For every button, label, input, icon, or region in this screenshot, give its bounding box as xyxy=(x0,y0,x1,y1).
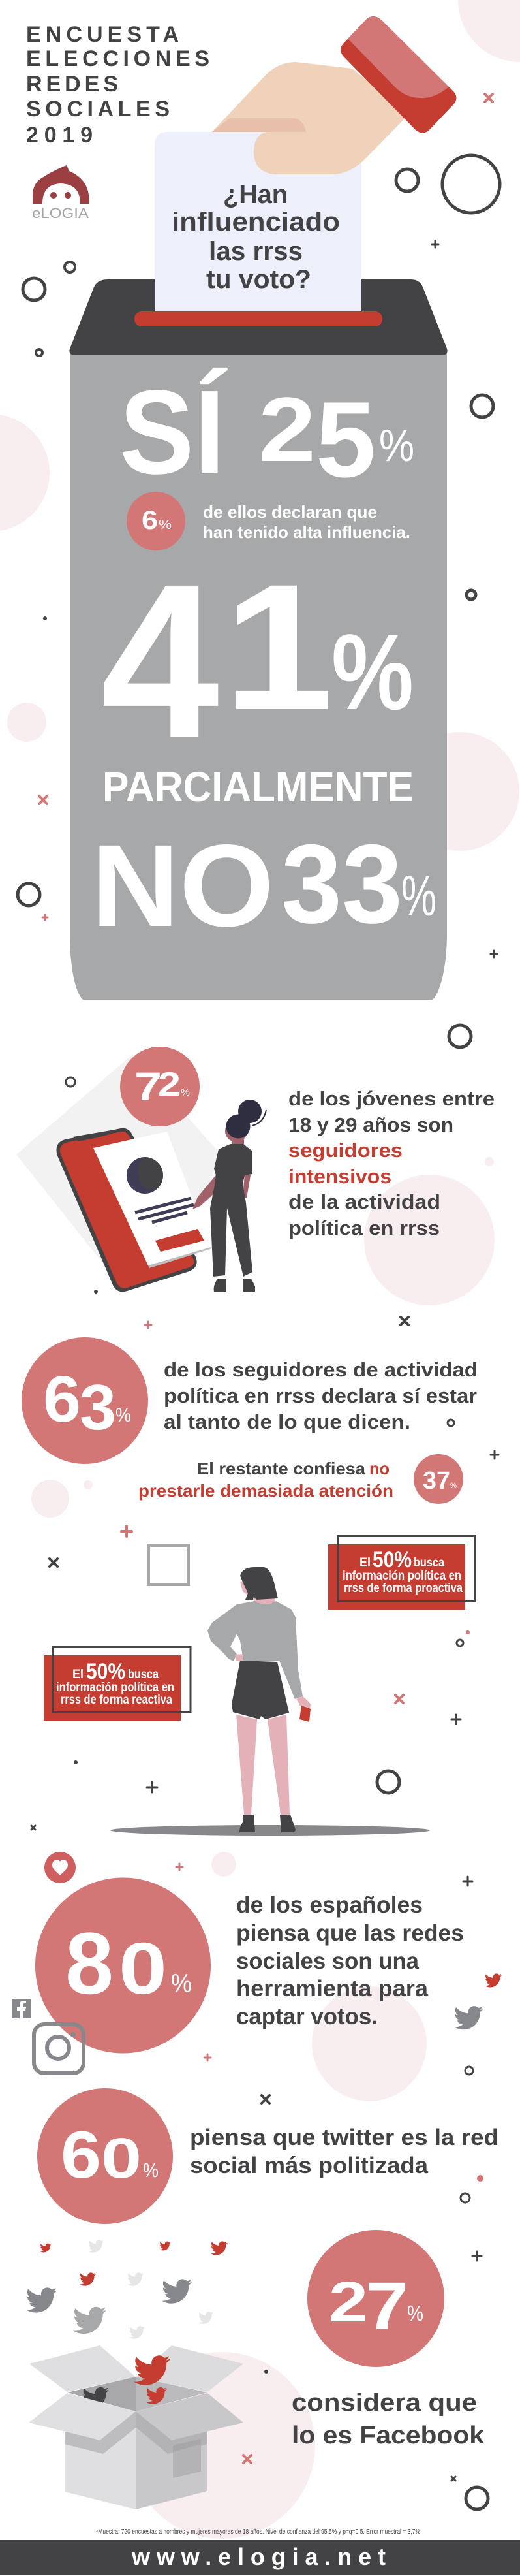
title: SOCIALES xyxy=(26,97,170,121)
answer: parcialmente 41% xyxy=(100,539,414,810)
text: remaining: El restante confiesa xyxy=(197,1459,366,1478)
stat circle: 60% xyxy=(37,2088,173,2224)
callout: 6%: % xyxy=(159,518,172,532)
text: spaniards: captar votos. xyxy=(236,2004,378,2029)
text: young followers: de los jóvenes entre xyxy=(288,1087,495,1110)
text: facebook xyxy=(292,2389,485,2449)
text: remaining xyxy=(138,1459,393,1501)
panel: proactive vs reactive xyxy=(44,1536,475,1836)
text: young followers: intensivos xyxy=(288,1165,391,1188)
text: young followers xyxy=(288,1087,495,1239)
title xyxy=(26,22,209,148)
icons: flying twitter birds xyxy=(26,2240,228,2339)
stat circle: 72%: 2 xyxy=(158,1066,181,1104)
ballot paper with question: tu voto? xyxy=(206,265,311,294)
stat circle: 72%: 7 xyxy=(134,1064,162,1109)
title: ENCUESTA xyxy=(26,22,179,47)
panel: 27% facebook xyxy=(26,2230,485,2509)
stat circle: 63%: 6 xyxy=(43,1363,81,1436)
answer: parcialmente 41%: % xyxy=(331,612,414,732)
illustration: phone xyxy=(56,1128,212,1292)
answer: si 25%: SÍ xyxy=(119,365,228,499)
callout: reactive: El xyxy=(72,1668,84,1681)
title: REDES xyxy=(26,72,118,97)
stat circle: 37%: % xyxy=(450,1481,457,1490)
callout: proactive: 50% xyxy=(373,1548,412,1572)
callout: proactive: El xyxy=(359,1556,371,1570)
text: young followers: de la actividad xyxy=(288,1190,440,1213)
panel: 72% young followers xyxy=(16,1047,495,1292)
text: spaniards: piensa que las redes xyxy=(236,1920,464,1946)
text: facebook: considera que xyxy=(292,2389,477,2417)
text: spaniards: de los españoles xyxy=(236,1892,423,1918)
text: facebook: lo es Facebook xyxy=(292,2422,485,2449)
icon: facebook xyxy=(12,1999,31,2018)
stat circle: 80% xyxy=(35,1878,211,2053)
icon: elogia logo: eLOGIA xyxy=(32,205,89,221)
text: young followers: política en rrss xyxy=(288,1216,440,1239)
stat circle: 72% xyxy=(120,1047,200,1126)
stat circle: 63%: 3 xyxy=(80,1371,116,1443)
callout: proactive: busca xyxy=(414,1556,444,1570)
ballot paper with question: influenciado xyxy=(172,208,340,236)
stat circle: 37%: 37 xyxy=(423,1467,450,1495)
illustration: woman from behind xyxy=(110,1567,430,1836)
stat circle: 60%: 0 xyxy=(101,2127,142,2190)
text: aware followers xyxy=(164,1358,478,1433)
callout: reactive xyxy=(44,1647,191,1721)
text: remaining: no xyxy=(369,1459,390,1478)
text: aware followers: política en rrss declara sí estar xyxy=(164,1384,477,1407)
callout: proactive: rrss de forma proactiva xyxy=(344,1582,463,1595)
stat circle: 27% xyxy=(307,2230,444,2367)
text: spaniards: sociales son una xyxy=(236,1948,420,1974)
panel: 60% twitter xyxy=(37,2088,498,2224)
stat circle: 60%: 6 xyxy=(61,2118,101,2192)
stat circle: 72%: % xyxy=(181,1087,190,1098)
stat circle: 63% xyxy=(22,1337,148,1464)
footnote: *Muestra: 720 encuestas a hombres y mujeres mayores de 18 años. Nivel de confianza del 95,5% y p=q=0.5. Error muestral = 3,7% xyxy=(96,2528,420,2536)
answer: si 25% xyxy=(119,365,414,500)
answer: no 33%: NO xyxy=(91,820,274,951)
stat circle: 80%: % xyxy=(171,1969,192,1998)
answer: si 25%: 5 xyxy=(316,379,376,500)
ballot slot xyxy=(134,311,382,326)
text: aware followers: de los seguidores de actividad xyxy=(164,1358,478,1381)
callout: 6%: de ellos declaran que xyxy=(203,502,377,522)
answer: parcialmente 41%: PARCIALMENTE xyxy=(102,763,414,810)
ballot paper with question xyxy=(155,132,361,311)
text: remaining: prestarle demasiada atención xyxy=(138,1481,393,1501)
icon: gray square frame xyxy=(149,1545,188,1584)
answer: parcialmente 41%: 4 xyxy=(100,539,221,784)
text: young followers: 18 y 29 años son xyxy=(288,1113,453,1136)
callout: 6%: 6 xyxy=(142,506,158,535)
illustration background diamond xyxy=(16,1055,222,1282)
callout: reactive: rrss de forma reactiva xyxy=(61,1693,172,1707)
stat circle: 60%: % xyxy=(143,2159,159,2182)
stat circle: 27%: 2 xyxy=(329,2270,368,2334)
footer bar: www.elogia.net xyxy=(131,2543,386,2570)
answer: parcialmente 41%: 1 xyxy=(224,547,333,748)
callout: proactive xyxy=(328,1536,475,1610)
callout: 6% xyxy=(127,492,410,550)
icon: twitter gray xyxy=(454,2006,483,2029)
ballot paper with question: las rrss xyxy=(209,237,303,266)
stat circle: 63%: % xyxy=(115,1405,131,1426)
text: spaniards: herramienta para xyxy=(236,1976,429,2001)
stat circle: 80%: 0 xyxy=(119,1928,167,2009)
answer: no 33%: % xyxy=(401,863,436,928)
icon: twitter red xyxy=(485,1973,502,1987)
text: young followers: seguidores xyxy=(288,1139,403,1162)
answer: si 25%: 2 xyxy=(258,378,316,481)
stat circle: 27%: 7 xyxy=(365,2268,408,2344)
answer: si 25%: % xyxy=(379,420,414,471)
text: spaniards xyxy=(236,1892,464,2029)
ballot box lid xyxy=(69,279,448,355)
text: twitter most political xyxy=(190,2125,498,2178)
callout: reactive: busca xyxy=(128,1668,159,1681)
text: twitter most political: social más politizada xyxy=(190,2153,429,2178)
ballot paper with question: ¿Han xyxy=(223,180,288,209)
icon: heart xyxy=(44,1852,76,1883)
callout: reactive: 50% xyxy=(86,1659,125,1684)
ballot box body xyxy=(70,353,447,1000)
panel: 63% aware xyxy=(22,1337,478,1504)
panel: ballot box xyxy=(69,16,456,1000)
text: aware followers: al tanto de lo que dicen. xyxy=(164,1410,410,1433)
stat circle: 37% xyxy=(414,1454,463,1504)
answer: no 33% xyxy=(91,820,436,951)
stat circle: 27%: % xyxy=(407,2301,423,2325)
stat circle: 80%: 8 xyxy=(65,1915,114,2012)
title: ELECCIONES xyxy=(26,46,209,71)
text: twitter most political: piensa que twitter es la red xyxy=(190,2125,498,2150)
illustration: woman with bun xyxy=(192,1100,266,1292)
callout: reactive: información política en xyxy=(56,1681,174,1694)
icon: elogia logo xyxy=(32,165,89,221)
footer bar xyxy=(0,2540,520,2575)
icon: instagram xyxy=(34,2024,84,2073)
panel: 80% spaniards xyxy=(12,1852,502,2073)
callout: 6%: han tenido alta influencia. xyxy=(203,522,410,542)
illustration: open box xyxy=(29,2345,243,2509)
callout: proactive: información política en xyxy=(343,1569,461,1583)
title: 2019 xyxy=(26,123,93,148)
answer: no 33%: 33 xyxy=(281,821,403,947)
icon: hand holding ballot xyxy=(212,16,457,174)
